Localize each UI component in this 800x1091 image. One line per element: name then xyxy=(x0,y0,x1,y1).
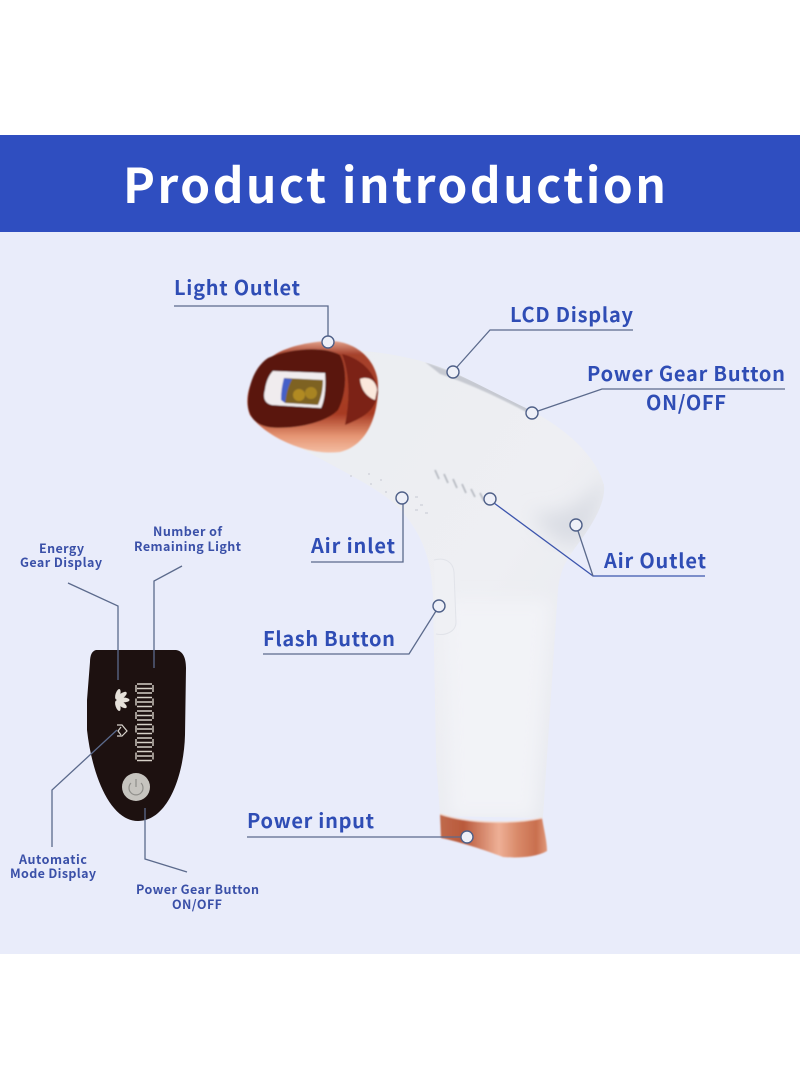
copper head xyxy=(247,341,378,453)
callout: LCD Display xyxy=(447,299,634,378)
callout: Number of Remaining Light xyxy=(134,521,242,668)
callout: Automatic Mode Display xyxy=(10,730,117,882)
callout: Power Gear Button: Power Gear Button xyxy=(587,358,785,387)
light window xyxy=(264,371,325,408)
panel face xyxy=(87,650,186,821)
callout: Air inlet xyxy=(310,492,408,562)
callout: Power Gear Button ON/OFF small xyxy=(136,808,259,913)
callout: Automatic Mode Display: Mode Display xyxy=(10,863,96,882)
callout: Number of Remaining Light: Number of xyxy=(153,521,223,540)
device body xyxy=(300,350,612,818)
head right shading xyxy=(342,354,378,425)
callout: Number of Remaining Light: Remaining Light xyxy=(134,536,242,555)
callout: Air inlet: Air inlet xyxy=(310,530,396,559)
callout: Flash Button: Flash Button xyxy=(263,623,395,652)
callout: Energy Gear Display xyxy=(20,538,118,680)
air vents xyxy=(435,470,484,501)
callout: LCD Display: LCD Display xyxy=(510,299,634,328)
title banner xyxy=(0,135,800,232)
callout: Power input: Power input xyxy=(247,805,375,834)
callout: Power Gear Button ON/OFF small: ON/OFF xyxy=(172,894,222,913)
head highlight xyxy=(360,378,377,400)
callout: Power Gear Button ON/OFF small: Power Gear Button xyxy=(136,879,259,898)
seven-segment digits xyxy=(136,684,153,760)
callout: Flash Button xyxy=(263,600,445,654)
air inlet dots xyxy=(350,474,428,513)
flash button xyxy=(434,559,456,634)
callout: Power input xyxy=(247,805,473,843)
dark inner face xyxy=(248,349,345,428)
device: hair removal handset xyxy=(247,341,612,857)
callout: Power Gear Button: ON/OFF xyxy=(646,387,726,416)
power button xyxy=(122,773,150,801)
background panel xyxy=(0,232,800,954)
automatic mode chevron xyxy=(117,725,127,736)
callout: Energy Gear Display: Energy xyxy=(39,538,84,557)
copper base xyxy=(440,814,547,857)
callout: Air Outlet: Air Outlet xyxy=(603,545,707,574)
callout: Automatic Mode Display: Automatic xyxy=(18,849,87,868)
callout: Light Outlet: Light Outlet xyxy=(174,272,301,301)
callout: Air Outlet xyxy=(484,493,707,576)
control panel closeup xyxy=(87,650,186,821)
callout: Energy Gear Display: Gear Display xyxy=(20,552,102,571)
callout: Light Outlet xyxy=(174,272,334,348)
energy gear fan xyxy=(114,688,130,712)
title: Product introduction xyxy=(123,147,666,217)
callout: Power Gear Button xyxy=(526,358,785,419)
